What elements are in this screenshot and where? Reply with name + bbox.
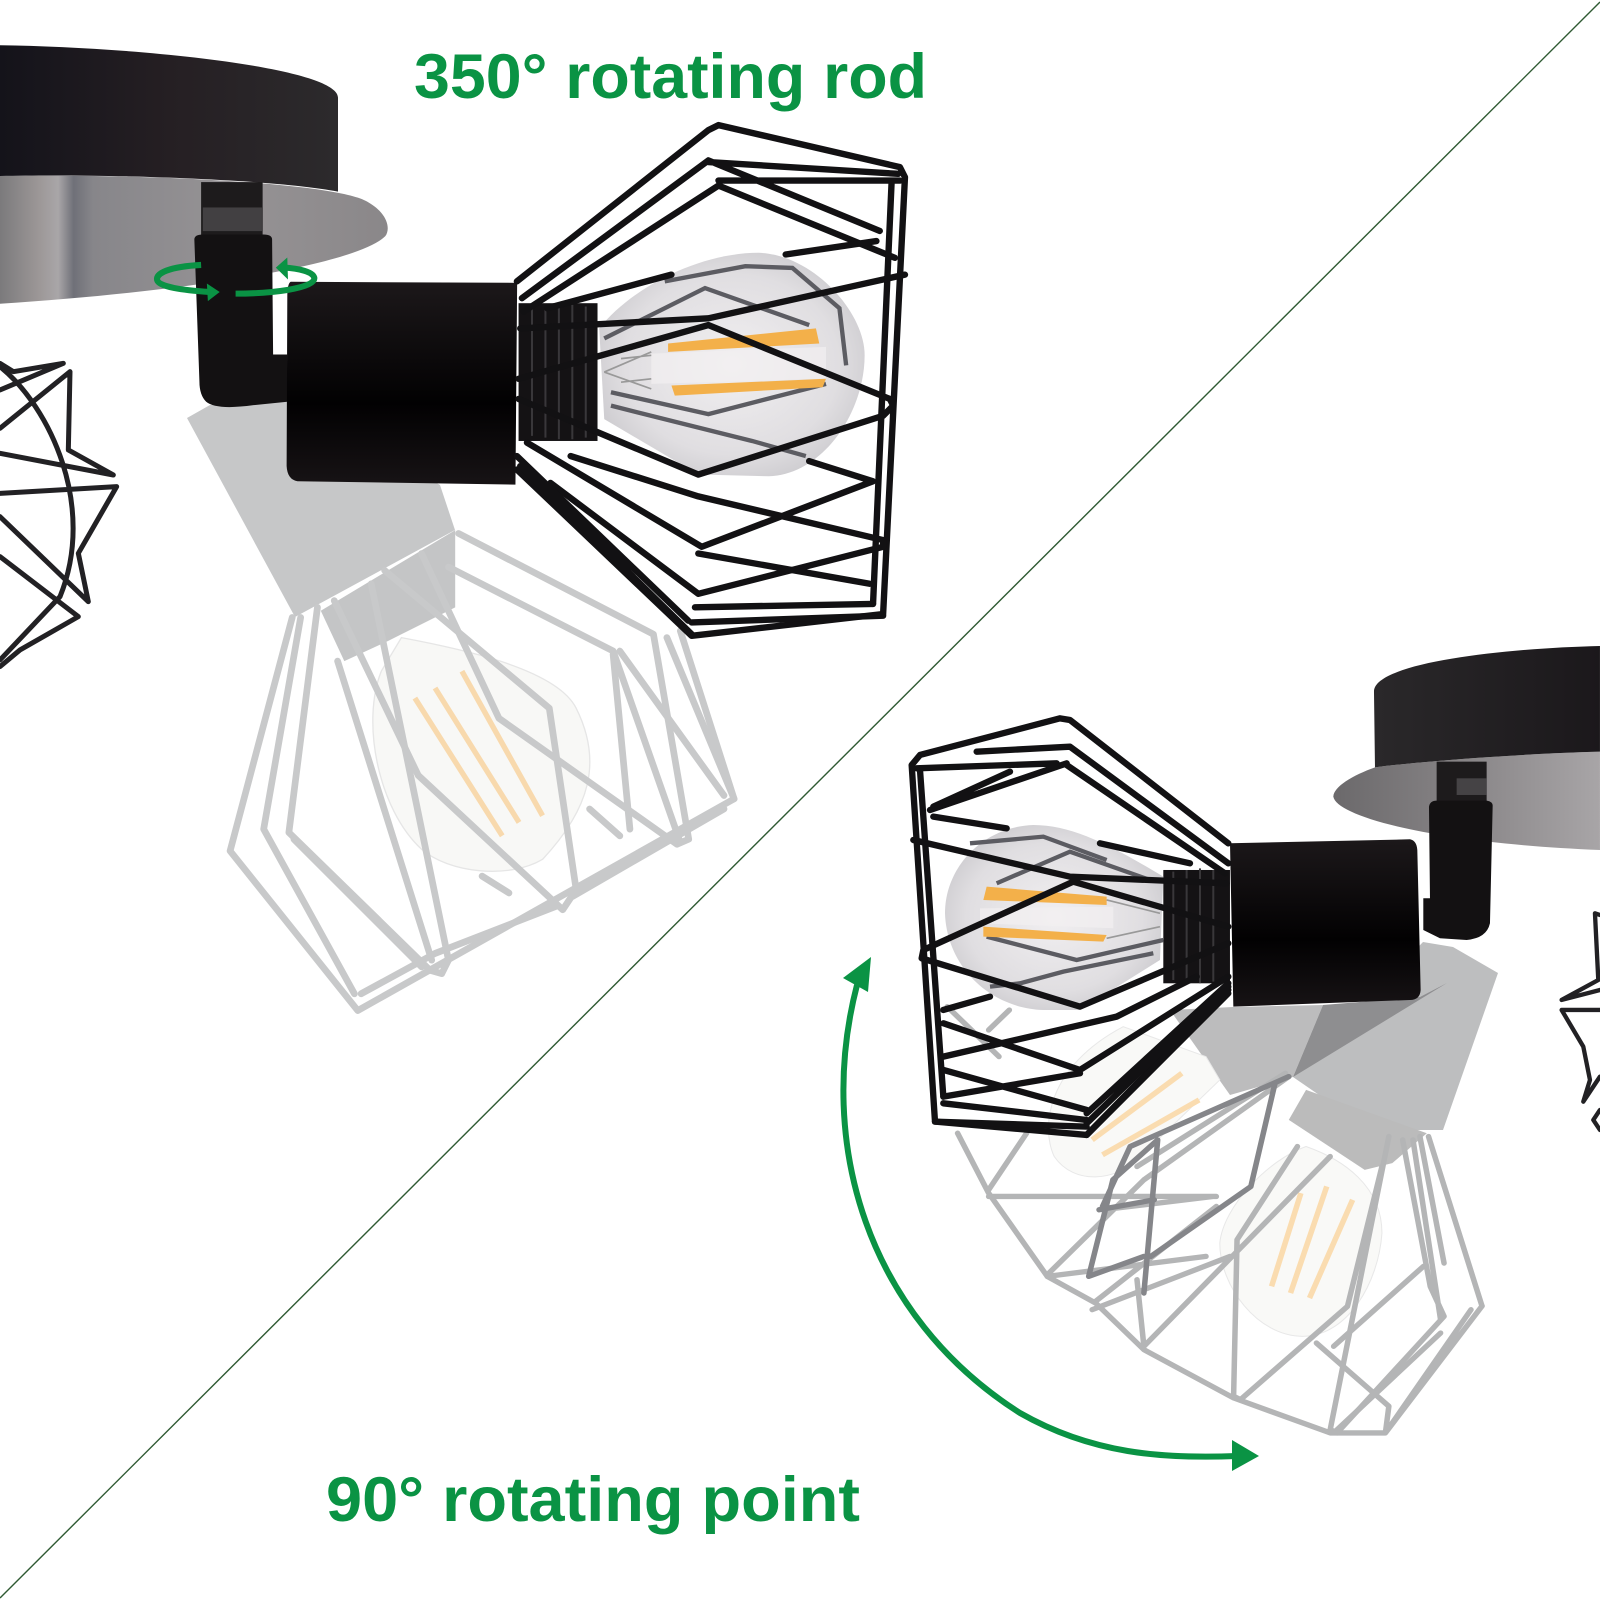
canopy: upper ceiling mount — [0, 45, 388, 304]
socket fins: upper lamp — [519, 303, 598, 441]
bulb: lower lamp — [945, 825, 1163, 1010]
title: 90 degree rotating point: 90° rotating point — [326, 1465, 860, 1535]
canopy: lower ceiling mount — [1333, 646, 1600, 850]
wire cage: lower lamp — [912, 718, 1228, 1135]
wire cage: upper lamp — [517, 125, 905, 636]
rotation arrow: 350 degree — [157, 257, 314, 301]
ghost lamp: upper lowered position — [187, 400, 734, 1011]
title: 350 degree rotating rod: 350° rotating rod — [414, 42, 927, 112]
rotation arrow: 90 degree — [843, 957, 1259, 1471]
lamp arm and cap: upper swivel — [194, 182, 517, 485]
partial neighbour lamp: right edge — [1562, 913, 1600, 1130]
lamp arm and cap: lower swivel — [1230, 762, 1493, 1007]
partial neighbour lamp: left edge — [0, 363, 117, 667]
bulb: upper lamp — [599, 253, 865, 476]
ghost lamps: lower lowered positions — [947, 942, 1498, 1433]
lower lamp: bulb and cage — [912, 718, 1230, 1135]
upper lamp: bulb and cage — [517, 125, 905, 636]
socket fins: lower lamp — [1163, 868, 1230, 983]
